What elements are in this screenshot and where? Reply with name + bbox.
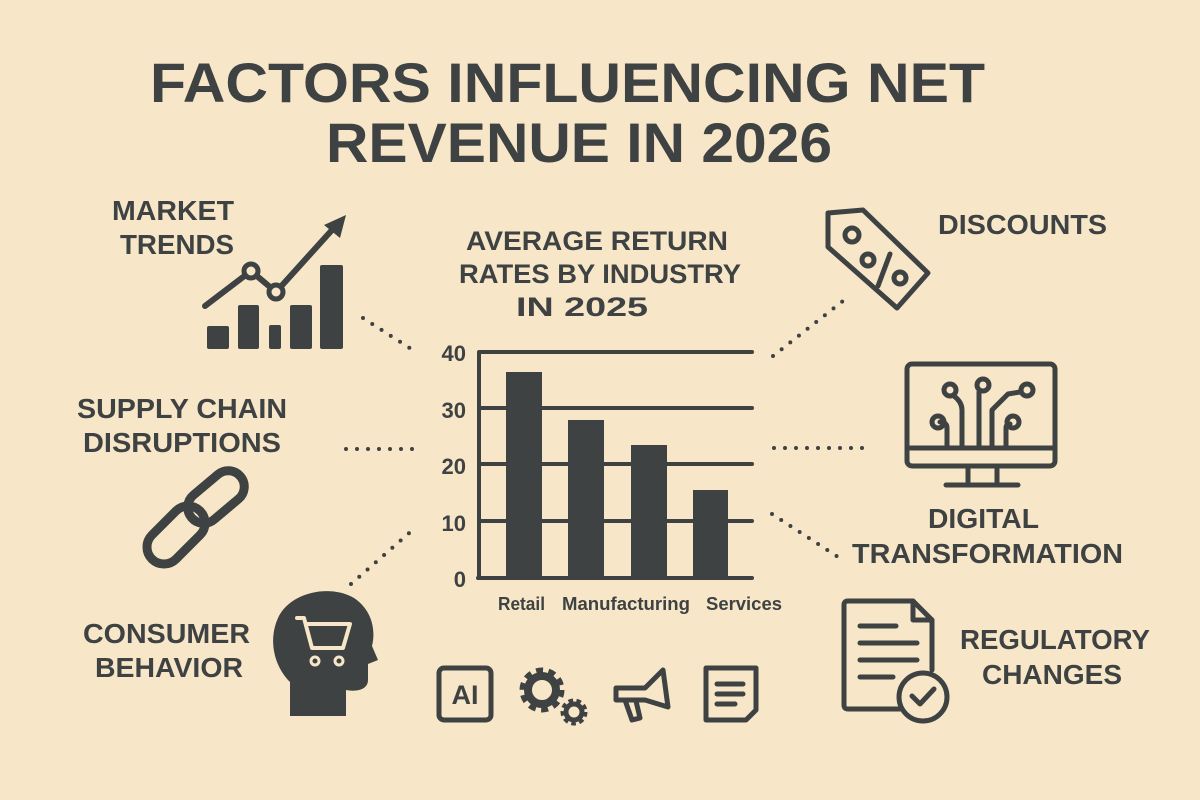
icon: AI: AI [452, 680, 478, 710]
bar chart: 10 [442, 511, 466, 536]
bar chart: 0 [454, 567, 466, 592]
label: market trends [112, 195, 234, 260]
bottom icons [439, 668, 756, 722]
label: digital transformation: DIGITAL [928, 503, 1039, 534]
label: digital transformation: TRANSFORMATION [852, 538, 1123, 569]
label: supply chain: SUPPLY CHAIN [77, 393, 287, 424]
dotted connectors [346, 297, 870, 584]
bar chart [442, 341, 782, 614]
title: REVENUE IN 2026 [326, 111, 832, 174]
label: consumer behavior: BEHAVIOR [95, 652, 243, 683]
icon: head with cart [273, 591, 378, 716]
label: supply chain [77, 393, 287, 458]
label: regulatory changes: CHANGES [982, 659, 1122, 690]
icon: AI [439, 668, 491, 720]
bar chart: 20 [442, 454, 466, 479]
icon: monitor [907, 364, 1055, 485]
label: market trends: TRENDS [120, 229, 234, 260]
bar chart: 40 [442, 341, 466, 366]
icon: regulatory document [844, 601, 947, 721]
chart title [459, 226, 741, 322]
icon: discount tag [828, 210, 928, 308]
chart title: RATES BY INDUSTRY [459, 259, 741, 289]
chart title: AVERAGE RETURN [466, 226, 728, 256]
label: consumer behavior: CONSUMER [83, 618, 250, 649]
label: discounts: DISCOUNTS [938, 209, 1107, 240]
bar chart: Retail [498, 594, 545, 614]
label: market trends: MARKET [112, 195, 234, 226]
label: consumer behavior [83, 618, 250, 683]
label: regulatory changes: REGULATORY [960, 624, 1150, 655]
chart title: IN 2025 [516, 292, 648, 322]
title [150, 51, 985, 174]
bar chart: Manufacturing [562, 594, 690, 614]
title: FACTORS INFLUENCING NET [150, 51, 985, 114]
icon: chain link [140, 464, 251, 571]
bar chart: 30 [442, 398, 466, 423]
label: supply chain: DISRUPTIONS [83, 427, 281, 458]
bar chart: Services [706, 594, 782, 614]
icon: notes [706, 668, 756, 720]
icon: megaphone [616, 670, 668, 720]
icon: market trends chart [205, 215, 346, 349]
icon: gears [525, 673, 584, 722]
label: regulatory changes [960, 624, 1150, 690]
label: digital transformation [852, 503, 1123, 569]
